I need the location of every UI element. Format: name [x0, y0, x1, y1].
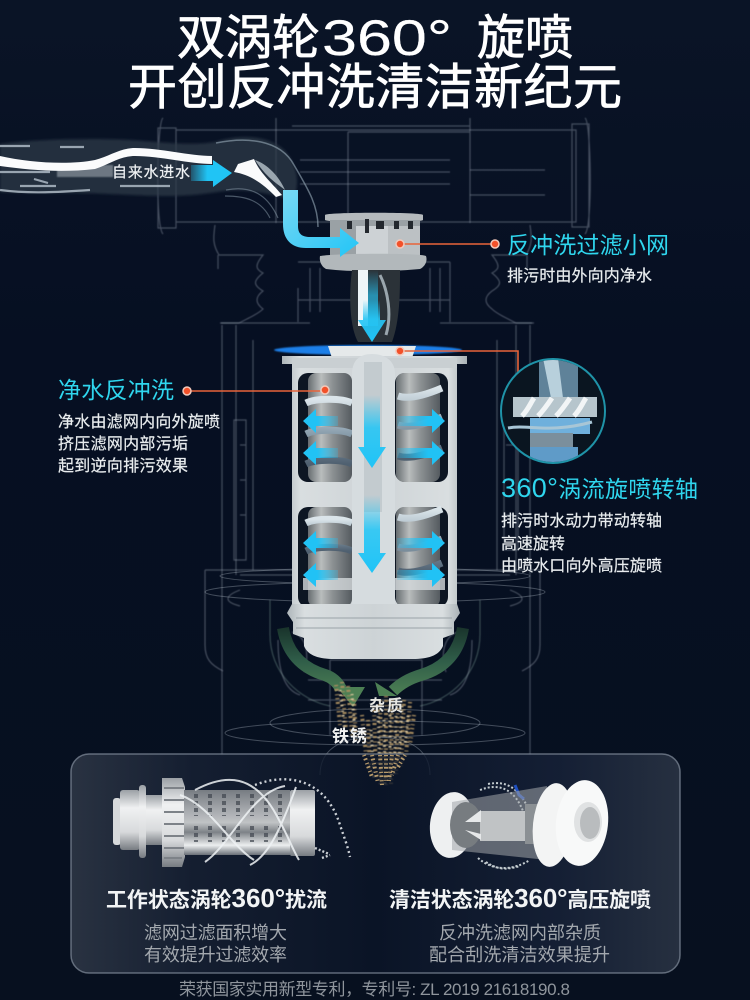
state text: working: 有效提升过滤效率	[144, 945, 287, 965]
label block: 360 vortex shaft	[501, 473, 698, 575]
centre rib	[352, 354, 395, 606]
product: turbine shaft	[113, 778, 350, 867]
label block: backwash mini filter: 排污时由外向内净水	[507, 267, 652, 285]
debris particles	[336, 682, 414, 786]
window: top left	[298, 373, 352, 482]
title: 双涡轮	[177, 12, 320, 65]
label: tap water in: 自来水进水	[112, 164, 190, 181]
label block: 360 vortex shaft: 360°涡流旋喷转轴	[501, 473, 698, 503]
label block: backwash mini filter: 反冲洗过滤小网	[507, 232, 669, 258]
label block: 360 vortex shaft: 由喷水口向外高压旋喷	[501, 557, 662, 575]
label: rust: 铁锈	[332, 727, 367, 746]
title: 旋喷	[477, 12, 573, 65]
wireframe housing	[158, 118, 590, 755]
arrow: flow into small filter	[283, 190, 359, 257]
product: cleaning filter	[427, 778, 612, 869]
state text: working: 滤网过滤面积增大	[144, 923, 287, 943]
wireframe rings	[205, 568, 545, 775]
blue swirl ring	[274, 345, 462, 355]
cartridge body	[282, 356, 467, 608]
window: bottom left	[298, 507, 352, 607]
water swirl	[180, 779, 350, 865]
state heading: working: 工作状态涡轮360°扰流	[106, 883, 327, 913]
small backwash filter	[320, 213, 427, 271]
title	[128, 10, 622, 115]
label block: 360 vortex shaft: 高速旋转	[501, 535, 565, 553]
main filter cartridge	[282, 346, 467, 659]
label block: 360 vortex shaft: 排污时水动力带动转轴	[501, 512, 662, 530]
callout dots	[183, 240, 499, 395]
label block: clean water backwash: 净水反冲洗	[58, 377, 174, 403]
turbine top	[328, 346, 416, 358]
arrow: water inlet	[191, 160, 232, 187]
label block: clean water backwash	[58, 377, 220, 475]
spray dots	[478, 783, 530, 869]
label: impurities: 杂质	[369, 696, 403, 715]
central water column	[350, 270, 400, 342]
label block: clean water backwash: 净水由滤网内向外旋喷	[58, 413, 220, 431]
arrows: radial jets	[303, 409, 445, 587]
state text: working	[144, 923, 287, 965]
state text: cleaning	[429, 923, 610, 965]
title: 开创反冲洗清洁新纪元	[128, 61, 622, 115]
title: 360°	[322, 10, 452, 66]
state text: cleaning: 配合刮洗清洁效果提升	[429, 945, 610, 965]
window: top right	[395, 373, 448, 482]
label block: clean water backwash: 挤压滤网内部污垢	[58, 435, 188, 453]
lens: spiral shaft close-up	[501, 358, 605, 463]
window: bottom right	[395, 507, 448, 607]
label block: clean water backwash: 起到逆向排污效果	[58, 457, 188, 475]
lower translucent band	[303, 578, 445, 590]
state text: cleaning: 反冲洗滤网内部杂质	[439, 923, 601, 943]
incoming water stream	[0, 137, 318, 227]
callout lines	[187, 244, 518, 391]
arrows: flow down the core	[358, 395, 386, 573]
debris over panel	[364, 755, 405, 785]
cartridge base	[287, 604, 460, 659]
state heading: cleaning: 清洁状态涡轮360°高压旋喷	[389, 883, 651, 913]
panel: dual turbine states	[71, 754, 680, 973]
label block: backwash mini filter	[507, 232, 669, 285]
green sewage flow	[283, 628, 463, 707]
patent footnote: 荣获国家实用新型专利，专利号: ZL 2019 21618190.8	[179, 980, 570, 999]
arrow: flow down to turbine	[358, 300, 386, 342]
